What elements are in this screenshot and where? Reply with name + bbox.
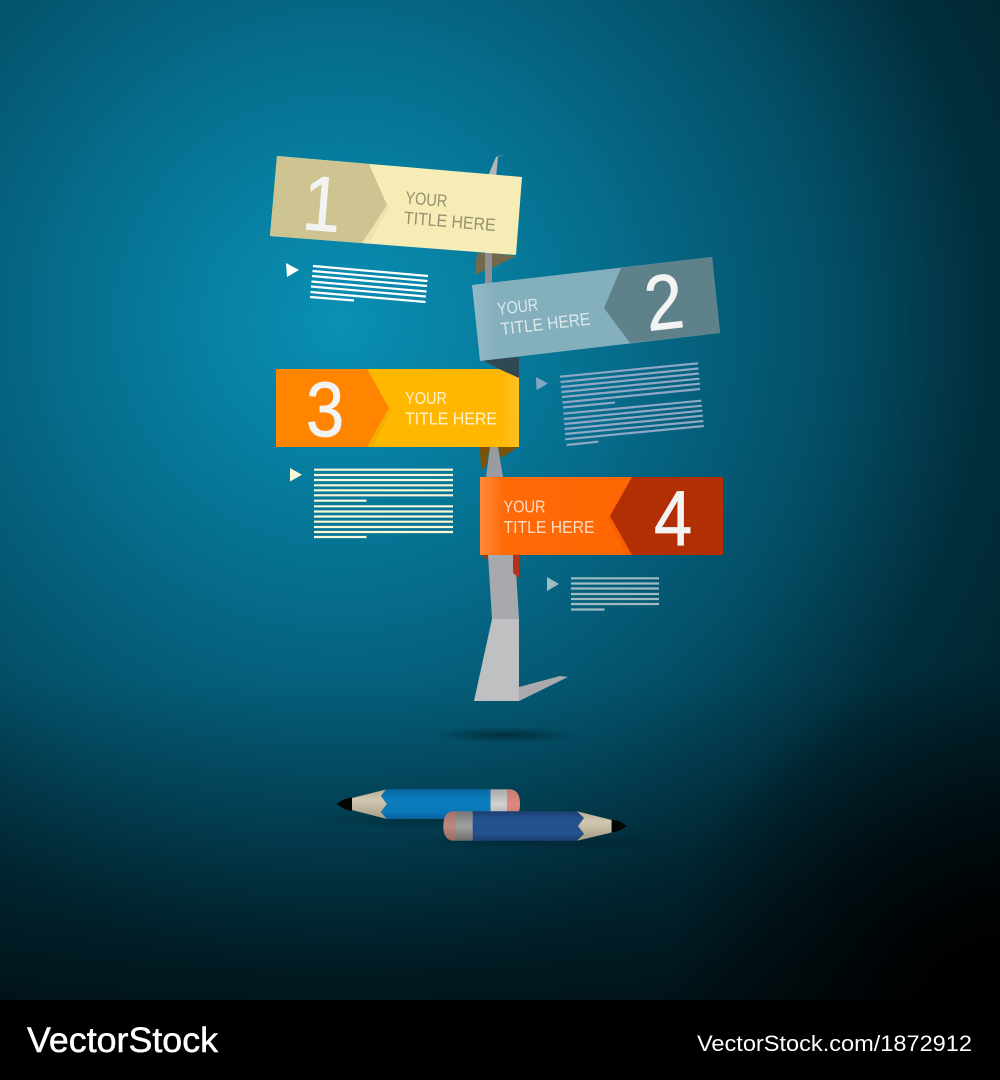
footer url: VectorStock.com/1872912 — [697, 1031, 972, 1056]
sign 2 — [472, 256, 720, 361]
text lines 2 — [536, 363, 704, 445]
title 3: TITLE HERE — [405, 408, 497, 428]
title 2: YOUR — [496, 294, 539, 319]
title 1 — [403, 188, 497, 235]
pencil: light blue — [337, 789, 520, 819]
signpost pole — [474, 154, 568, 701]
text lines 1 — [286, 263, 428, 302]
title 4: YOUR — [504, 496, 546, 516]
number 2: 2 — [640, 256, 688, 348]
title 3: YOUR — [405, 388, 447, 408]
footer bar — [0, 1000, 1000, 1080]
title 1: TITLE HERE — [403, 208, 497, 235]
footer logo: VectorStock — [27, 1021, 219, 1060]
sign 4 — [480, 474, 723, 562]
number 4: 4 — [654, 474, 692, 562]
fold under sign 3 — [480, 447, 518, 470]
text lines 4 — [547, 577, 659, 610]
title 4 — [504, 496, 594, 537]
sign 3 — [276, 365, 519, 453]
title 2: TITLE HERE — [500, 309, 591, 339]
text lines 3 — [290, 468, 453, 537]
title 4: TITLE HERE — [504, 517, 594, 537]
title 1: YOUR — [405, 188, 448, 211]
number 3: 3 — [306, 365, 344, 453]
fold under sign 1 — [475, 253, 516, 275]
sign 1 — [270, 156, 522, 255]
number 1: 1 — [300, 158, 345, 249]
fold under sign 4 — [482, 555, 519, 578]
pole shadow — [433, 727, 577, 743]
title 2 — [496, 294, 591, 339]
pencil shadows — [295, 811, 680, 851]
title 3 — [405, 388, 497, 428]
pencil: dark blue — [443, 811, 627, 841]
fold under sign 2 — [482, 357, 519, 379]
